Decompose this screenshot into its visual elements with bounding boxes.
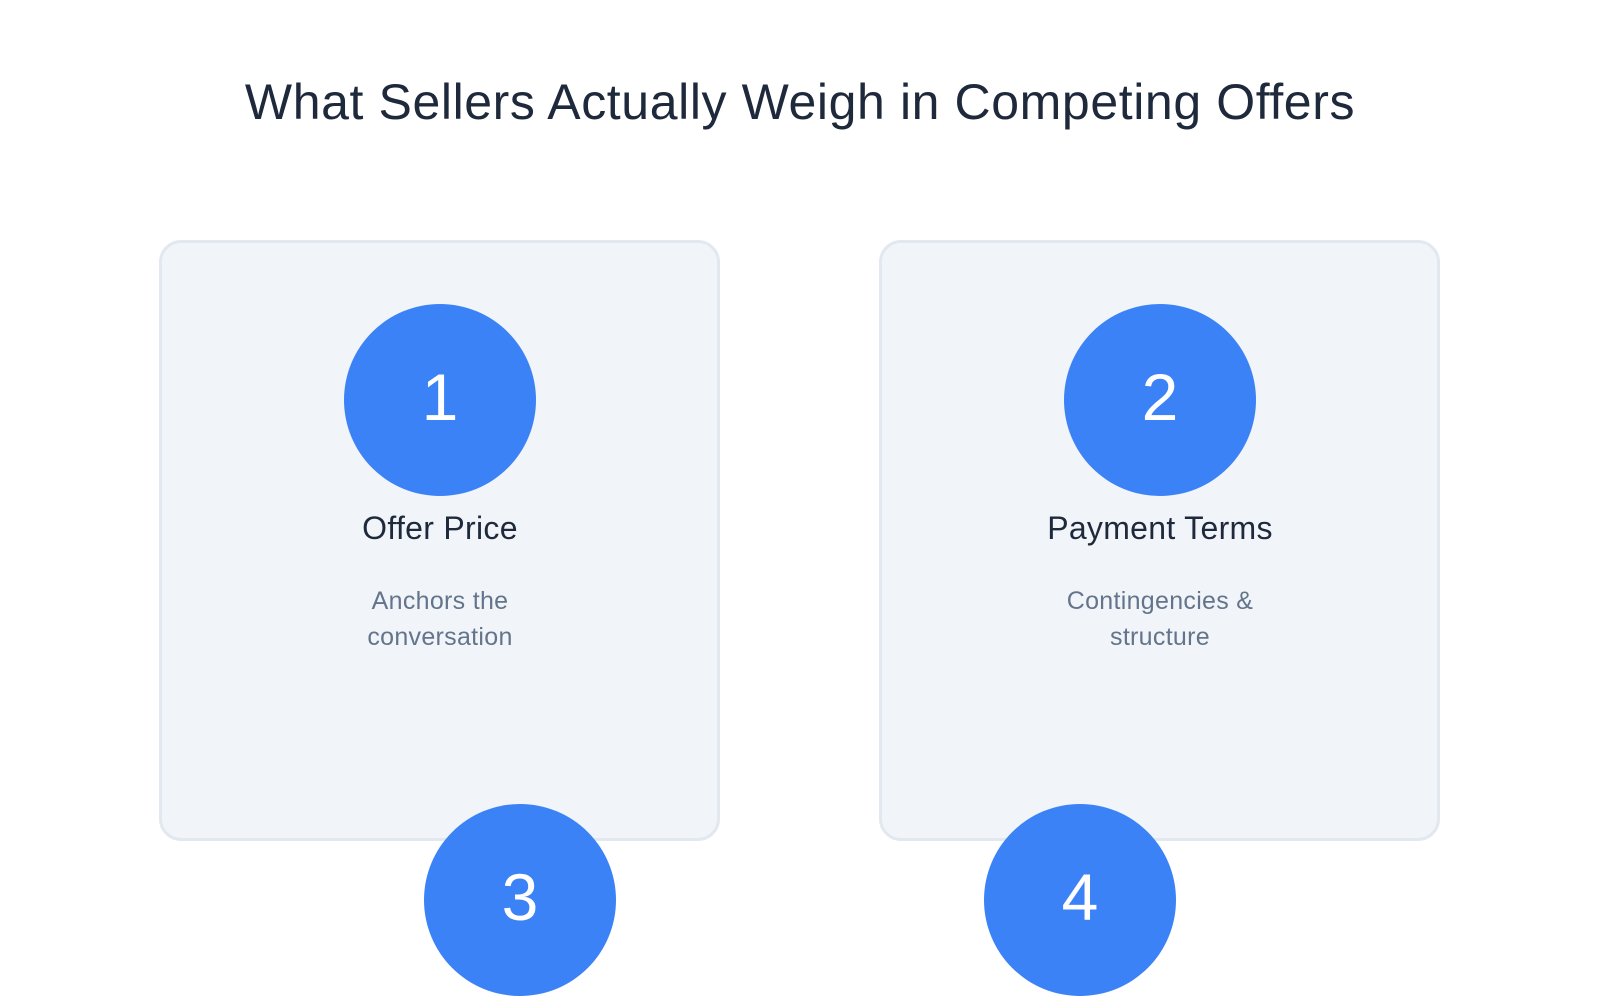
label: offer price: Offer Price [362,510,518,546]
icon: circle 1 [344,304,536,496]
description: payment terms: structure [1110,623,1210,651]
description: offer price: conversation [367,623,513,651]
icon: circle 4: 4 [1062,860,1098,934]
panel: payment terms [879,240,1440,841]
label: payment terms: Payment Terms [1047,510,1273,546]
description: payment terms [1067,587,1253,651]
title: What Sellers Actually Weigh in Competing Offers [245,74,1355,130]
description: offer price: Anchors the [372,587,508,615]
icon: circle 3 [424,804,616,996]
panel: offer price [159,240,720,841]
description: offer price [367,587,513,651]
icon: circle 3: 3 [502,860,538,934]
description: payment terms: Contingencies & [1067,587,1253,615]
icon: circle 2: 2 [1142,360,1178,434]
icon: circle 4 [984,804,1176,996]
icon: circle 1: 1 [422,360,458,434]
icon: circle 2 [1064,304,1256,496]
